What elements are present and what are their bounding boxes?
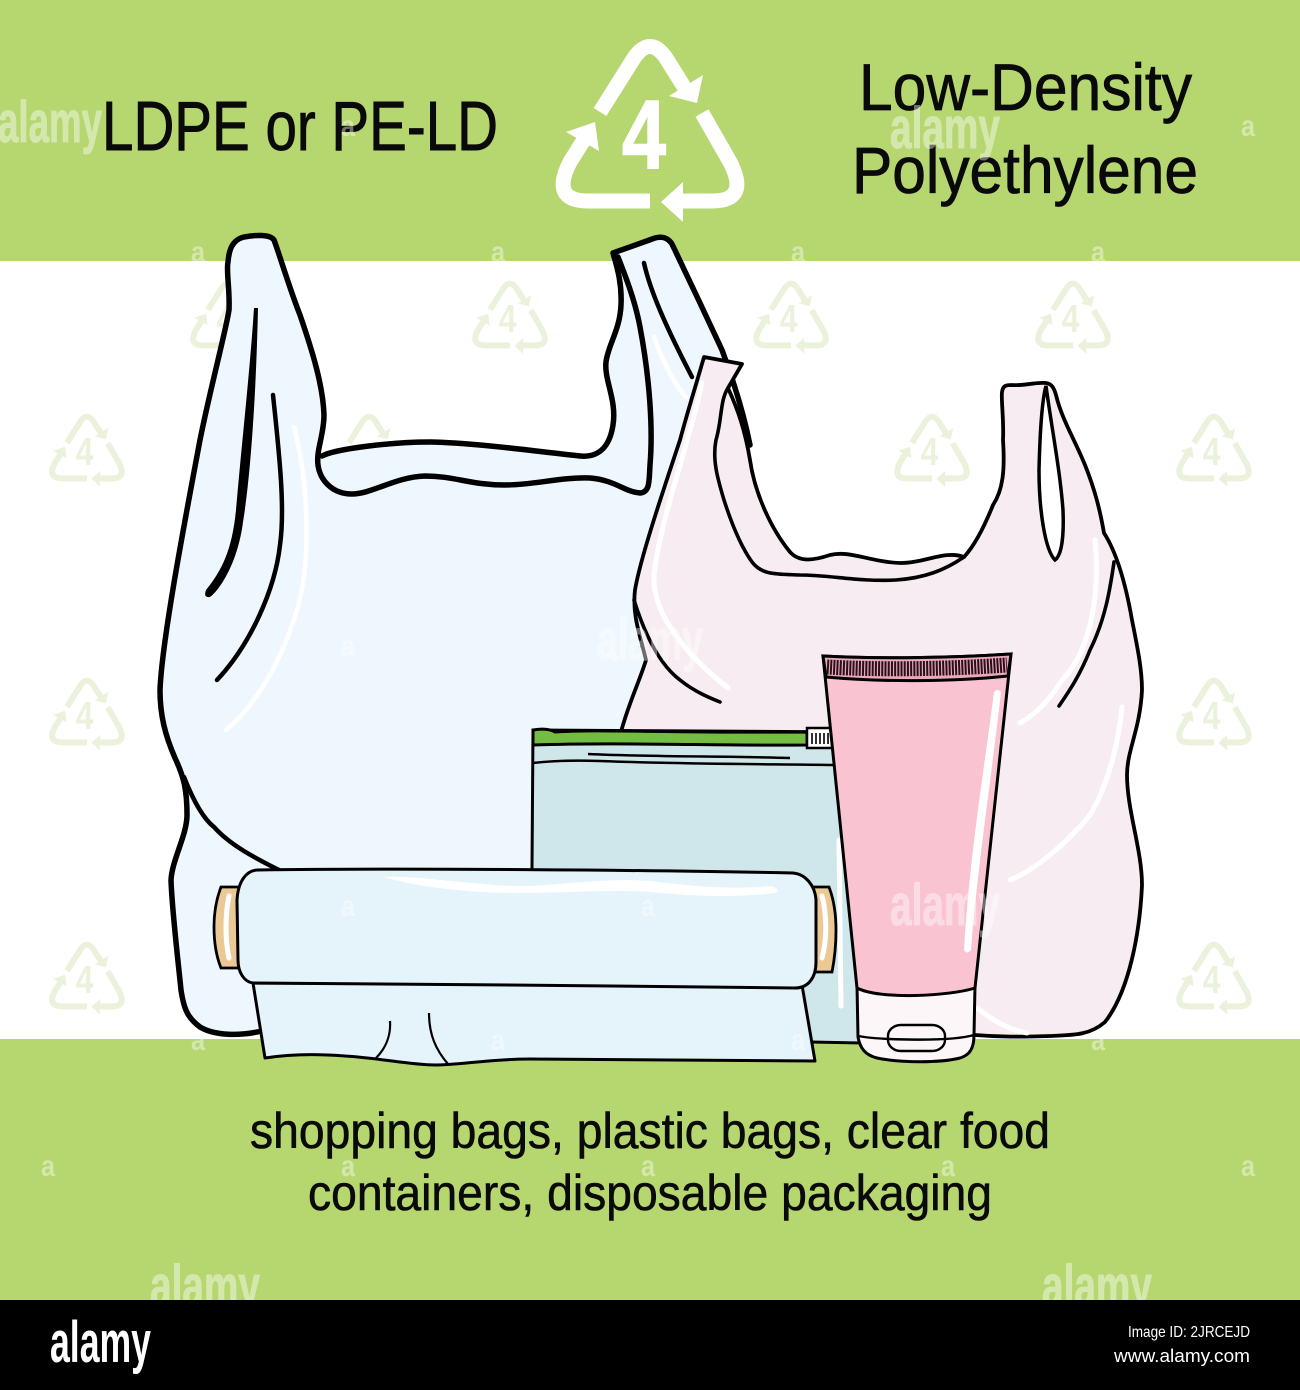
blue bag handle edge — [322, 237, 750, 456]
footer image id: Image ID: 2JRCEJD — [1128, 1324, 1250, 1341]
watermarks: a — [791, 236, 805, 269]
roll body — [237, 869, 816, 988]
pink bag handle gap — [1039, 386, 1063, 560]
pink bag highlight streaks — [654, 383, 1122, 1033]
watermarks: a — [1091, 1024, 1105, 1057]
blue bag outline — [160, 235, 651, 1034]
background pattern of recycling symbols — [52, 284, 1249, 1015]
cosmetic tube — [823, 654, 1011, 1062]
watermarks: alamy — [150, 1254, 260, 1319]
heading: abbreviation: LDPE or PE-LD — [102, 87, 498, 165]
roll left cap — [214, 887, 242, 968]
watermarks: alamy — [597, 608, 703, 673]
zip bag highlight — [839, 840, 841, 1006]
tube cap — [857, 985, 975, 1062]
watermarks: alamy — [1042, 1254, 1152, 1319]
watermarks: a — [41, 1150, 55, 1183]
background pattern of recycling symbols: 4 — [76, 959, 94, 1002]
watermarks: alamy — [0, 90, 102, 155]
watermarks: a — [1241, 1150, 1255, 1183]
watermarks: a — [641, 890, 655, 923]
cap highlights — [226, 896, 826, 958]
top green band — [0, 0, 1300, 261]
tube crimp band — [823, 654, 1011, 681]
watermarks: a — [341, 890, 355, 923]
pink bag inner lines — [634, 388, 1114, 706]
footer bar — [0, 1300, 1300, 1390]
watermarks: a — [341, 110, 355, 143]
watermarks: a — [341, 1150, 355, 1183]
tube highlight — [964, 690, 1001, 952]
green zip seal — [533, 729, 807, 745]
watermarks: a — [491, 1024, 505, 1057]
watermarks: a — [341, 630, 355, 663]
background pattern of recycling symbols: 4 — [780, 298, 798, 341]
background pattern of recycling symbols: 4 — [217, 298, 235, 341]
heading: full name: Polyethylene — [852, 133, 1198, 207]
unrolled sheet — [253, 983, 815, 1065]
product list caption: shopping bags, plastic bags, clear food — [250, 1103, 1050, 1159]
watermarks: a — [491, 236, 505, 269]
background pattern of recycling symbols: 4 — [1203, 695, 1221, 738]
watermarks: a — [641, 1150, 655, 1183]
background pattern of recycling symbols: 4 — [1203, 431, 1221, 474]
watermarks: a — [791, 1024, 805, 1057]
background pattern of recycling symbols: 4 — [499, 298, 517, 341]
product list caption: containers, disposable packaging — [308, 1165, 992, 1221]
blue bag folds — [205, 308, 258, 597]
footer website: www.alamy.com — [1113, 1346, 1250, 1366]
bottom green band — [0, 1039, 1300, 1300]
heading: full name: Low-Density — [859, 50, 1192, 124]
footer bar overlay to clip watermarks — [0, 1300, 1300, 1390]
background pattern of recycling symbols: 4 — [76, 695, 94, 738]
zip slider — [807, 728, 833, 748]
watermarks: a — [1241, 110, 1255, 143]
plastic wrap roll — [214, 869, 836, 1065]
watermarks: a — [941, 1150, 955, 1183]
background pattern of recycling symbols: 4 — [76, 431, 94, 474]
zip bag lines — [533, 754, 834, 765]
background pattern of recycling symbols: 4 — [1203, 959, 1221, 1002]
icon: recycling code 4 symbol: 4 — [622, 80, 666, 189]
watermarks: a — [191, 236, 205, 269]
watermarks: a — [191, 1024, 205, 1057]
pink shopping bag — [621, 357, 1142, 1037]
tube body — [823, 654, 1011, 996]
icon: recycling code 4 symbol — [563, 46, 737, 222]
heading: full name — [852, 50, 1198, 207]
zip bag — [532, 728, 860, 1043]
watermarks: alamy — [890, 96, 1000, 161]
footer logo: alamy — [50, 1310, 151, 1375]
sheet creases — [376, 1013, 448, 1064]
background pattern of recycling symbols: 4 — [1062, 298, 1080, 341]
roll right cap — [810, 887, 836, 972]
blue shopping bag — [160, 235, 750, 1035]
product list caption — [250, 1103, 1050, 1221]
watermarks: a — [1091, 236, 1105, 269]
roll highlight — [384, 877, 777, 896]
background pattern of recycling symbols: 4 — [921, 431, 939, 474]
watermarks: alamy — [890, 873, 1000, 938]
blue bag highlight streaks — [226, 337, 686, 730]
